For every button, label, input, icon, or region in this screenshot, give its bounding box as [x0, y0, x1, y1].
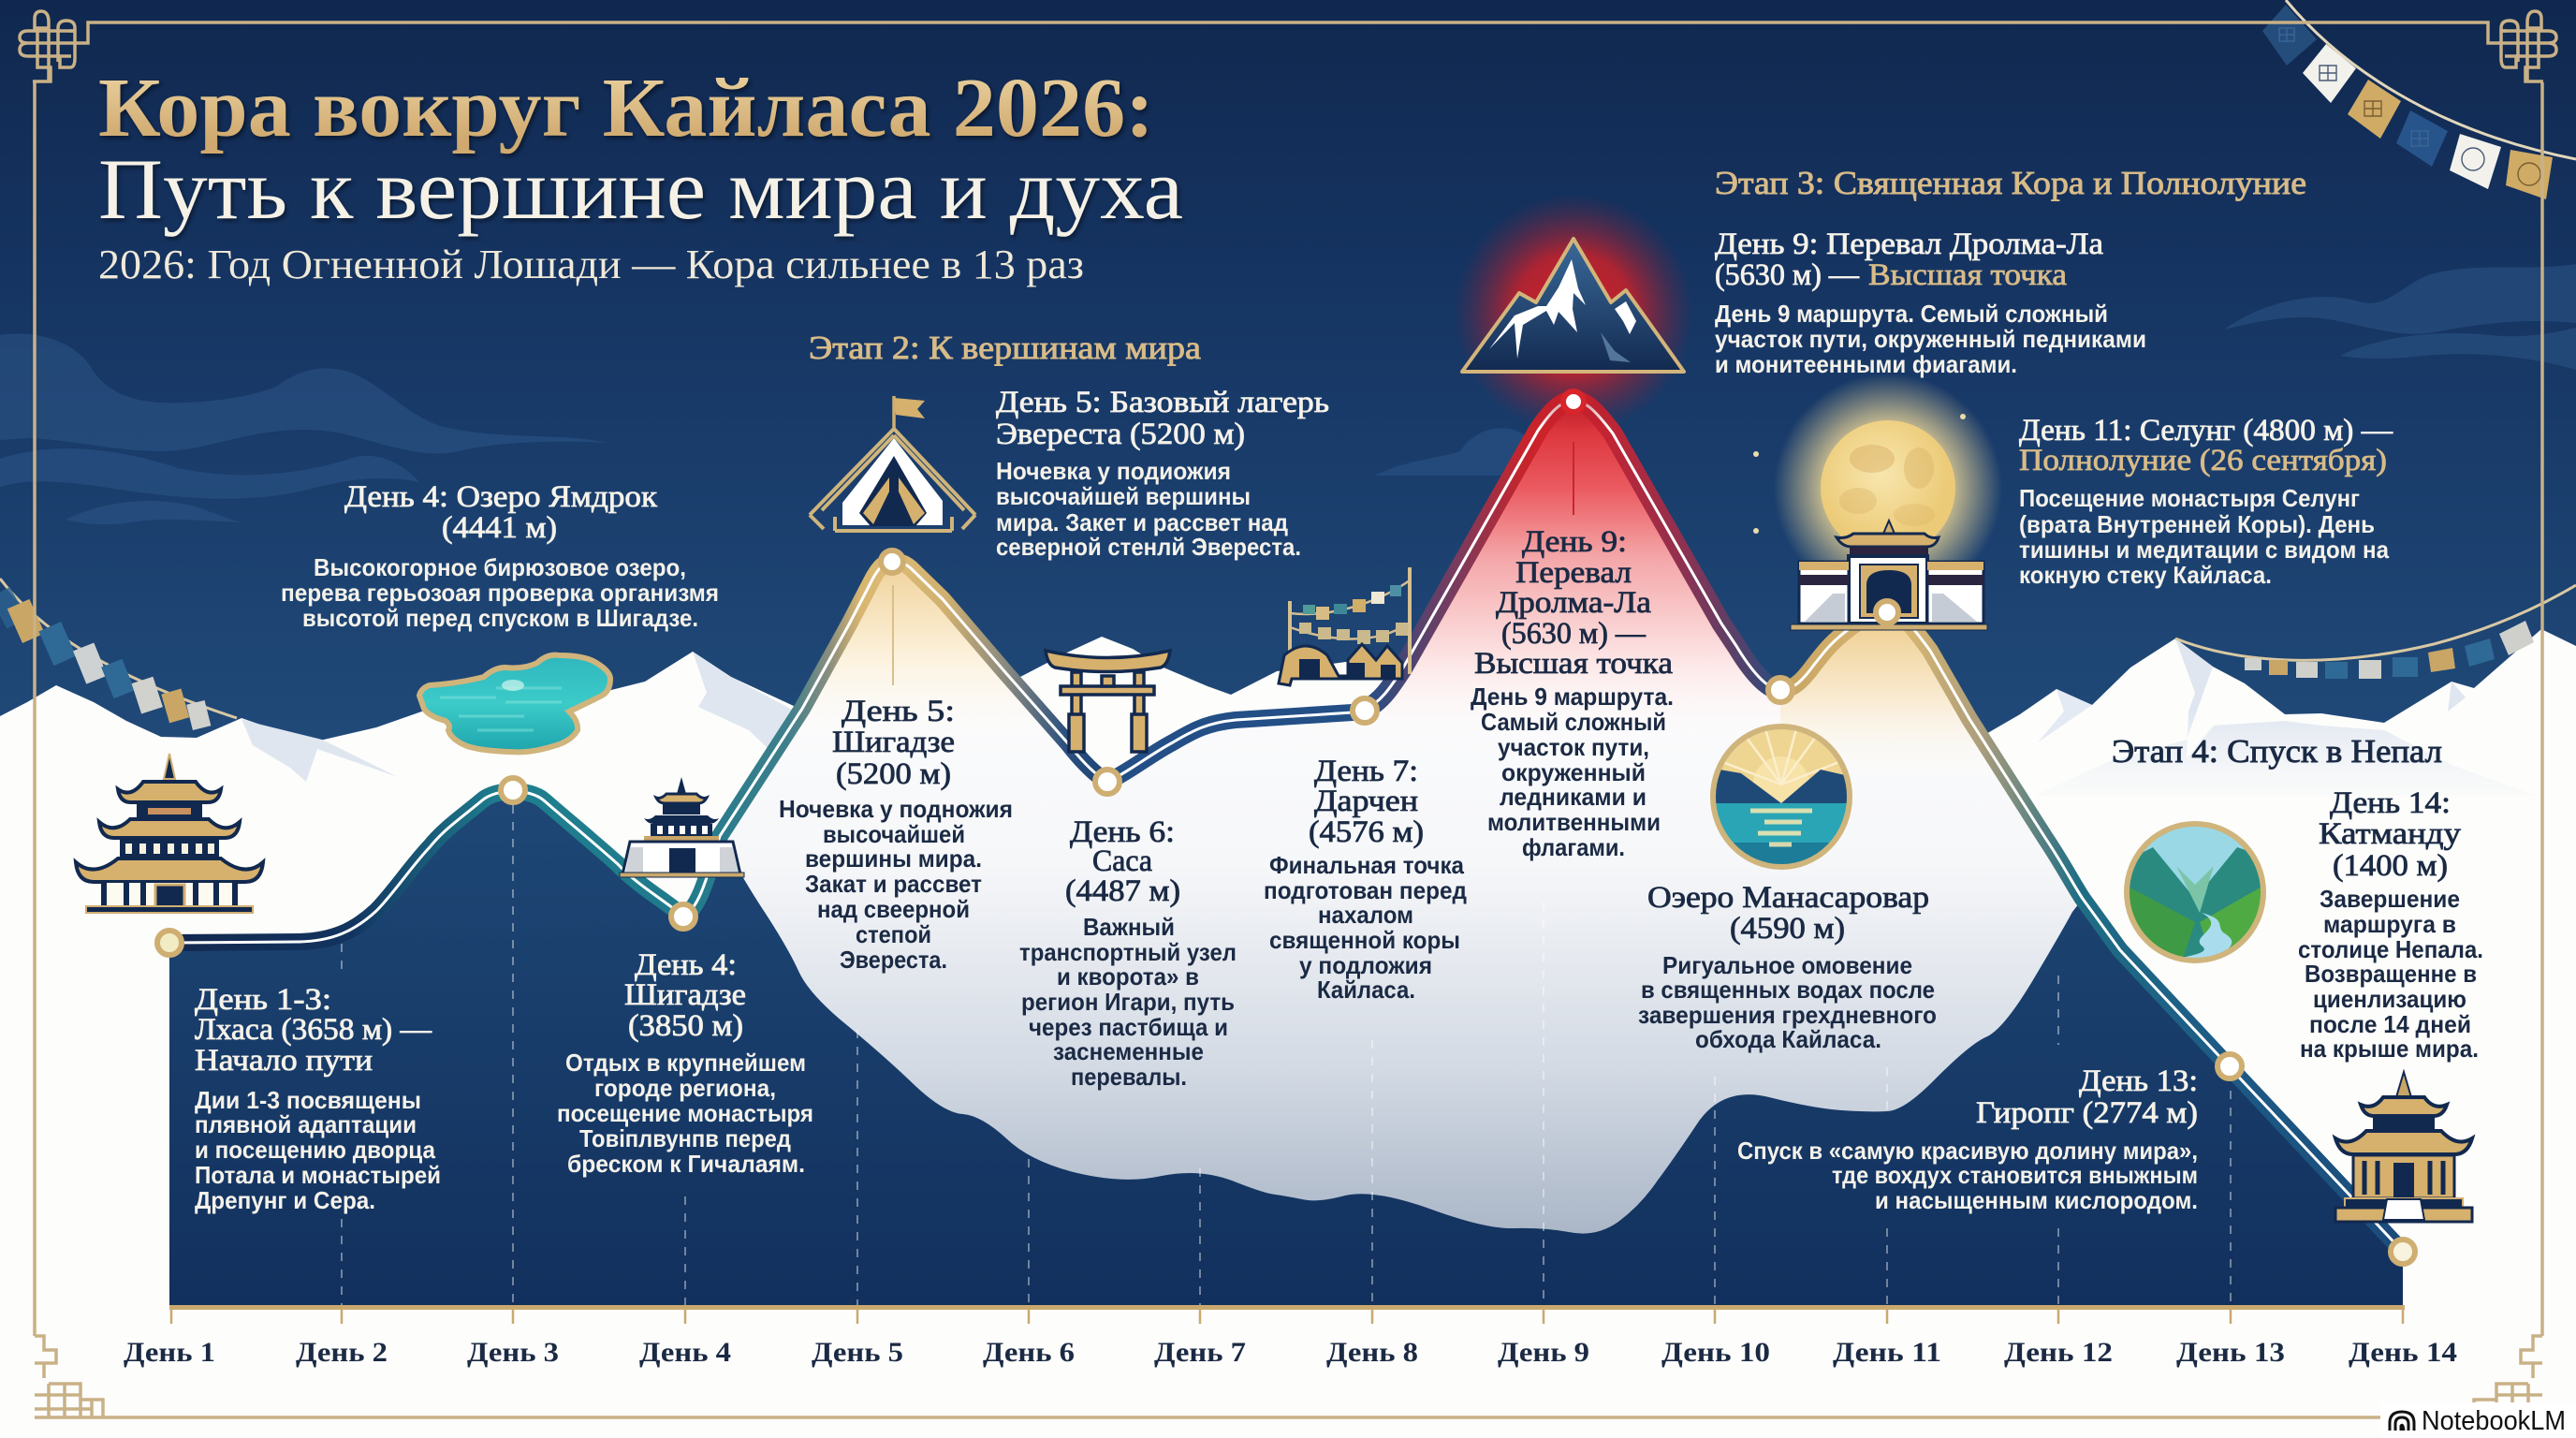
axis labels: День 9: [1498, 1337, 1589, 1368]
text block: Everest base camp: День 5: Базовый лагерь: [996, 386, 1329, 419]
text block: Dolma-La peak: День 9 маршрута.: [1471, 682, 1674, 711]
elevation area: navy ground: [169, 791, 2403, 1307]
text block: Kathmandu: День 14:: [2330, 786, 2451, 820]
text block: Shigatse day 4: Отдых в крупнейшем: [565, 1049, 806, 1077]
text block: Kathmandu: после 14 дней: [2309, 1010, 2471, 1038]
title: [98, 62, 1183, 237]
text block: Shigatse day 5: День 5:: [842, 695, 955, 728]
text block: Shigatse day 5: Закат и рассвет: [805, 870, 982, 898]
text block: Darchen: у подложия: [1299, 951, 1432, 979]
title: Путь к вершине мира и духа: [98, 141, 1183, 237]
title: Кора вокруг Кайласа 2026:: [98, 62, 1154, 154]
axis labels: День 8: [1326, 1337, 1418, 1368]
text block: Manasarovar: Ригуальное омовение: [1662, 951, 1912, 979]
text block: Saga: День 6:: [1070, 815, 1175, 849]
text block: Yamdrok: День 4: Озеро Ямдрок: [344, 480, 658, 514]
text block: Selung full moon: [2019, 414, 2393, 589]
text block: Selung full moon: Полнолуние (26 сентября): [2019, 444, 2387, 477]
text block: Yamdrok: высотой перед спуском в Шигадзе.: [302, 604, 698, 632]
text block: Shigatse day 4: Шигадзе: [624, 978, 746, 1012]
icon: red-glow Kailas mountain: [1454, 194, 1693, 433]
axis labels: День 12: [2004, 1337, 2113, 1368]
text block: Saga: через пастбища и: [1029, 1013, 1228, 1041]
text block: Kathmandu: циенлизацию: [2313, 985, 2466, 1013]
text block: Shigatse day 4: Товiплвунпв перед: [579, 1124, 791, 1152]
axis labels: День 13: [2176, 1337, 2285, 1368]
text block: Gyirong: Гиропг (2774 м): [1976, 1096, 2198, 1130]
text block: Dolma-La right: участок пути, окруженный педниками: [1715, 325, 2146, 353]
NotebookLM badge: [2380, 1402, 2576, 1438]
text block: Kathmandu: (1400 м): [2333, 849, 2448, 883]
text block: Shigatse day 5: над свеерной: [817, 895, 970, 923]
icon: green valley medallion: [2125, 822, 2265, 964]
text block: Darchen: [1264, 755, 1467, 1004]
text block: Selung full moon: (врата Внутренней Коры). День: [2019, 510, 2375, 538]
text block: Lhasa: Дии 1-3 посвящены: [195, 1086, 421, 1114]
axis labels: День 2: [296, 1337, 388, 1368]
axis labels: День 11: [1833, 1337, 1941, 1368]
text block: Saga: регион Игари, путь: [1021, 988, 1235, 1016]
text block: Saga: Важный: [1083, 913, 1175, 941]
text block: Gyirong: тде вохдух становится вныжным: [1832, 1161, 2198, 1189]
text block: Shigatse day 5: (5200 м): [836, 757, 951, 791]
text block: Lhasa: и посещению дворца: [195, 1136, 435, 1164]
axis labels: День 1: [124, 1337, 215, 1368]
text block: Dolma-La peak: флагами.: [1522, 833, 1625, 861]
clouds: upper left: [0, 334, 607, 524]
axis labels: День 7: [1154, 1337, 1246, 1368]
text block: Dolma-La right: День 9 маршрута. Семый сложный: [1715, 300, 2108, 328]
stage 4 heading: Этап 4: Спуск в Непал: [2112, 733, 2442, 770]
text block: Yamdrok: [281, 480, 719, 632]
text block: Everest base camp: мира. Закет и рассвет над: [996, 508, 1288, 536]
text block: Yamdrok: (4441 м): [442, 511, 557, 545]
route nodes: [157, 391, 2415, 1264]
text block: Shigatse day 5: Эвереста.: [840, 946, 947, 974]
text block: Shigatse day 5: высочайшей: [823, 820, 965, 848]
text block: Saga: [1019, 815, 1237, 1091]
text block: Shigatse day 4: посещение монастыря: [557, 1099, 813, 1127]
text block: Manasarovar: завершения грехдневного: [1638, 1001, 1937, 1029]
snow mountains: [0, 629, 2576, 1438]
icon: turquoise lake Yamdrok: [419, 655, 610, 752]
text block: Lhasa: Начало пути: [195, 1044, 373, 1078]
icon: tent and flag: [810, 396, 975, 531]
text block: Dolma-La peak: Самый сложный: [1481, 708, 1666, 736]
text block: Dolma-La right: и монитеенными фиагами.: [1715, 350, 2017, 378]
icon: full moon: [1753, 374, 2002, 602]
sky background: [0, 0, 2576, 749]
text block: Selung full moon: тишины и медитации с видом на: [2019, 536, 2389, 564]
text block: Saga: (4487 м): [1065, 874, 1180, 908]
text block: Lhasa: Лхаса (3658 м) —: [195, 1013, 432, 1047]
axis labels: [124, 1337, 2457, 1368]
text block: Dolma-La right: Высшая точка: [1868, 258, 2067, 292]
text block: Dolma-La peak: Перевал: [1515, 556, 1632, 590]
axis labels: День 14: [2349, 1337, 2457, 1368]
text block: Manasarovar: обхода Кайласа.: [1695, 1025, 1881, 1053]
text block: Dolma-La peak: молитвенными: [1487, 808, 1661, 836]
text block: Dolma-La right: День 9: Перевал Дролма-Ла: [1715, 227, 2103, 261]
text block: Gyirong: и насыщенным кислородом.: [1875, 1186, 2198, 1214]
text block: Dolma-La peak: окруженный: [1501, 758, 1646, 786]
text block: Darchen: Кайласа.: [1317, 976, 1415, 1004]
text block: Dolma-La peak: Дролма-Ла: [1496, 586, 1651, 620]
axis labels: День 10: [1661, 1337, 1770, 1368]
text block: Darchen: Дарчен: [1314, 785, 1418, 818]
text block: Dolma-La peak: ледниками и: [1500, 783, 1647, 811]
icon: Shigatse monastery: [620, 777, 744, 877]
text block: Everest base camp: высочайшей вершины: [996, 482, 1251, 510]
axis labels: День 3: [467, 1337, 559, 1368]
text block: Lhasa: [195, 983, 441, 1214]
text block: Shigatse day 5: Шигадзе: [832, 726, 955, 759]
text block: Shigatse day 4: (3850 м): [628, 1009, 743, 1043]
text block: Shigatse day 5: Ночевка у подножия: [779, 795, 1013, 823]
text block: Darchen: Финальная точка: [1269, 851, 1464, 879]
text block: Lhasa: Потала и монастырей: [195, 1161, 441, 1189]
text block: Lhasa: плявной адаптации: [195, 1110, 417, 1138]
text block: Gyirong: Спуск в «самую красивую долину мира»,: [1737, 1137, 2198, 1165]
prayer flags: right lower string: [2175, 585, 2576, 679]
icon: Lake Manasarovar medallion: [1709, 724, 1853, 871]
text block: Kathmandu: Завершение: [2320, 885, 2460, 913]
stage 2 heading: Этап 2: К вершинам мира: [809, 330, 1201, 366]
text block: Manasarovar: [1638, 881, 1937, 1053]
text block: Dolma-La peak: участок пути,: [1498, 733, 1649, 761]
icon: Kathmandu temple: [2335, 1072, 2472, 1222]
prayer flags: top right: [2262, 0, 2576, 199]
text block: Saga: заснеменные: [1053, 1037, 1204, 1065]
peak marker lines: [893, 442, 1573, 685]
text block: Everest base camp: Эвереста (5200 м): [996, 418, 1245, 451]
text block: Kathmandu: Катманду: [2319, 817, 2462, 851]
corner knot: top right: [2485, 11, 2556, 82]
route band: [169, 401, 2403, 1252]
icon: flag poles and village: [1279, 567, 1410, 685]
text block: Shigatse day 5: степой: [856, 920, 931, 948]
text block: Saga: транспортный узел: [1019, 938, 1237, 966]
icon: torii gate: [1046, 651, 1170, 752]
text block: Darchen: нахалом: [1318, 901, 1413, 929]
text block: Kathmandu: маршруга в: [2323, 910, 2456, 938]
day guide lines: [342, 805, 2231, 1306]
text block: Selung full moon: кокную стеку Кайласа.: [2019, 561, 2272, 589]
icon: Selung monastery gate: [1791, 521, 1987, 630]
text block: Everest base camp: [996, 386, 1329, 561]
text block: Dolma-La peak: Высшая точка: [1474, 647, 1673, 681]
text block: Shigatse day 4: [557, 948, 813, 1178]
clouds: upper right: [1374, 264, 2576, 476]
corner knot: bottom right: [2474, 1336, 2542, 1417]
text block: Saga: и кворота» в: [1057, 962, 1199, 990]
text block: Kathmandu: на крыше мира.: [2300, 1034, 2479, 1063]
text block: Everest base camp: Ночевка у подиожия: [996, 457, 1231, 485]
NotebookLM badge: NotebookLM: [2422, 1406, 2566, 1436]
text block: Shigatse day 4: бреском к Гичалаям.: [567, 1150, 805, 1178]
subtitle: 2026: Год Огненной Лошади — Кора сильнее в 13 раз: [98, 242, 1084, 287]
text block: Manasarovar: (4590 м): [1730, 912, 1845, 946]
text block: Dolma-La right: [1715, 227, 2146, 378]
prayer flags: left string: [0, 579, 237, 730]
text block: Saga: перевалы.: [1071, 1063, 1187, 1091]
text block: Shigatse day 4: День 4:: [635, 948, 737, 982]
text block: Manasarovar: Оэеро Манасаровар: [1647, 881, 1929, 915]
corner knot: top left: [20, 11, 91, 82]
text block: Gyirong: [1737, 1064, 2198, 1214]
text block: Shigatse day 4: городе региона,: [594, 1074, 776, 1102]
text block: Gyirong: День 13:: [2079, 1064, 2198, 1098]
corner knot: bottom left: [35, 1336, 115, 1417]
text block: Dolma-La right: (5630 м) —: [1715, 258, 1860, 292]
text block: Yamdrok: перева герьозоая проверка организмя: [281, 579, 719, 607]
axis labels: День 6: [983, 1337, 1075, 1368]
icon: Lhasa pagoda: [76, 754, 263, 913]
text block: Manasarovar: в священных водах после: [1641, 976, 1935, 1004]
text block: Darchen: священной коры: [1269, 926, 1460, 954]
text block: Darchen: подготован перед: [1264, 876, 1467, 904]
text block: Darchen: День 7:: [1314, 755, 1418, 788]
text block: Saga: Саса: [1092, 844, 1152, 878]
axis: [169, 1305, 2405, 1324]
text block: Shigatse day 5: вершины мира.: [805, 844, 982, 873]
text block: Kathmandu: Возвращенне в: [2305, 960, 2477, 988]
text block: Dolma-La peak: (5630 м) —: [1501, 617, 1647, 651]
text block: Yamdrok: Высокогорное бирюзовое озеро,: [314, 553, 686, 581]
text block: Lhasa: День 1-3:: [195, 983, 331, 1017]
text block: Shigatse day 5: [779, 695, 1013, 974]
text block: Kathmandu: [2298, 786, 2483, 1063]
text block: Dolma-La peak: День 9:: [1522, 525, 1627, 559]
axis labels: День 5: [812, 1337, 903, 1368]
stage 3 heading: Этап 3: Священная Кора и Полнолуние: [1715, 165, 2306, 201]
elevation area: light valley: [727, 412, 2078, 1234]
text block: Darchen: (4576 м): [1309, 815, 1424, 849]
text block: Kathmandu: столице Непала.: [2298, 935, 2483, 963]
text block: Everest base camp: северной стенлй Эвереста.: [996, 533, 1301, 561]
text block: Lhasa: Дрепунг и Сера.: [195, 1186, 375, 1214]
text block: Selung full moon: Посещение монастыря Селунг: [2019, 484, 2360, 512]
text block: Dolma-La peak: [1471, 525, 1674, 861]
text block: Selung full moon: День 11: Селунг (4800 м) —: [2019, 414, 2393, 448]
axis labels: День 4: [639, 1337, 731, 1368]
